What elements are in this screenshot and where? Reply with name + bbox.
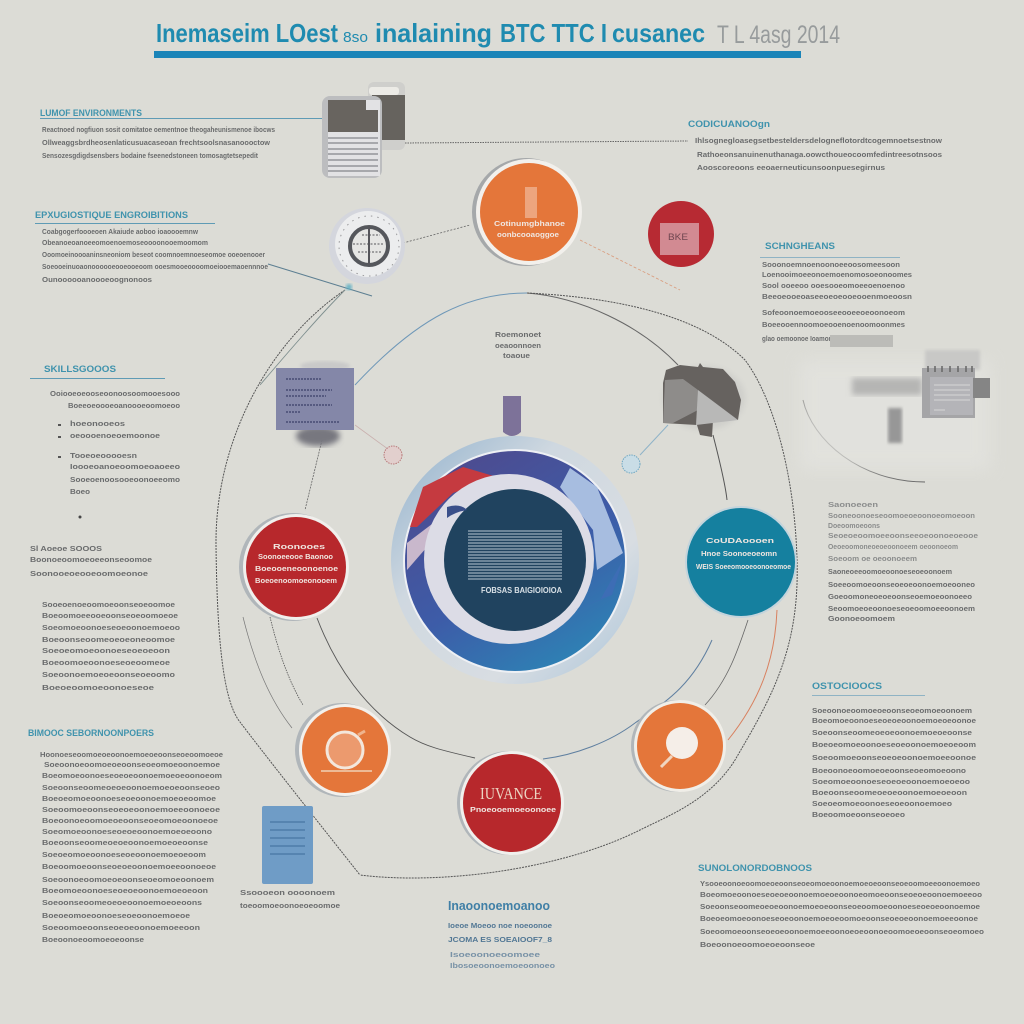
panel: left bottom text: Boeomoeoonoeseoeoeoonoemoeoeoon bbox=[42, 886, 208, 895]
panel: right middle text: Seoeoeoomoeeoonseeoeoonoeoeooe bbox=[828, 531, 978, 540]
panel: left bottom text: Soeoomoeoonseoeoeoonoemoeeoonoeoe bbox=[42, 805, 220, 814]
title: T L 4asg 2014 bbox=[717, 21, 840, 49]
panel: left second text: Obeanoeoanoeeomoenoemoseoooonooemoomom bbox=[42, 238, 208, 247]
panel: right middle text: Goonoeoomoem bbox=[828, 614, 895, 623]
panel: left second text: Ounoooooanoooeoognonoos bbox=[42, 275, 152, 284]
panel: left bottom text: Boeoeomoeoonoeseoeoonoemoeoeoomoe bbox=[42, 794, 216, 803]
panel: left bottom text: Soeoonseoomeoeoeoonoemoeoeoons bbox=[42, 898, 202, 907]
panel: bottom right text: Ysooeoonoeoomoeoeoonseoeomoeoonoemoeoeoonseoeoomoeeoonoemoeo bbox=[700, 879, 980, 888]
icon: book bbox=[262, 806, 313, 884]
panel: bottom center text: Ibosoeoonoemoeoonoeo bbox=[450, 961, 555, 970]
title underline bbox=[154, 51, 801, 58]
panel: left bottom text: Soeoonoeoomoeoeoonseoeomoeoonoemoe bbox=[44, 760, 220, 769]
panel: left bottom text: Boeoonoeoomoeoeoonseoeomoeoonoeoe bbox=[42, 816, 218, 825]
panel: left block five bbox=[42, 600, 180, 692]
title bbox=[156, 18, 840, 49]
panel: left skills text: Ioooeoanoeoomoeoaoeeo bbox=[70, 462, 180, 471]
panel: left block five: Sooeoenoeoomoeoonseoeoomoe bbox=[42, 600, 175, 609]
central hub: FOBSAS BAIGIOIOIOA bbox=[481, 586, 562, 595]
panel: left block five: Soeoeomoeoonoeseoeoeoon bbox=[42, 646, 170, 655]
panel: bottom right text: Boeomoeoonoeseoeoeoonoemoeoeoonoeomoeoonseoeoeoonoemoeeoo bbox=[700, 890, 982, 899]
panel: right middle text: Sooneoonoeseoomoeoeoonoeomoeoon bbox=[828, 511, 975, 520]
panel: left bottom text: Soeoonoeoomoeoeoonseoeomoeoonoem bbox=[42, 875, 214, 884]
icon: gauge bbox=[329, 208, 405, 290]
panel: right middle text: Goeoomoneoeoeoonseoemoeoonoeeo bbox=[828, 592, 972, 601]
panel: left bottom text: BIMOOC SEBORNOONPOERS bbox=[28, 728, 154, 738]
circle: teal right: WEIS Soeeomooeoonoeomoe bbox=[696, 564, 791, 571]
panel: left bottom text: Soeoonseoomeoeoeoonoemoeoeoonseoeo bbox=[42, 783, 220, 792]
central hub bbox=[391, 436, 639, 684]
panel: left skills text: Tooeoeooooesn bbox=[70, 451, 137, 460]
icon: data sheet bbox=[276, 361, 354, 446]
panel: right middle text bbox=[828, 500, 978, 623]
panel: bottom right text: SUNOLONORDOBNOOS bbox=[698, 863, 812, 873]
circle: red left bbox=[239, 513, 349, 621]
panel: left block five: Boeoeoomoeoonoeseoe bbox=[42, 683, 154, 692]
title: inalaining bbox=[375, 18, 492, 48]
panel: right lower text: Soeomoeoonoeseoeoeoonoemoeoeoo bbox=[812, 777, 970, 786]
icon: camera device bbox=[663, 363, 745, 437]
panel: top left text: Ollweaggsbrdheosenlaticusuacaseoan frechtsoolsnasanoooctow bbox=[42, 138, 270, 147]
panel: top right text: Aooscoreoons eeoaerneuticunsoonpuesegirnus bbox=[697, 163, 885, 172]
panel: right schedule text: Loenooimoeeonoemoenomosoeonoomes bbox=[762, 270, 912, 279]
circle: orange top: Cotinumgbhanoe bbox=[494, 221, 565, 228]
circle: red top right: BKE bbox=[668, 232, 688, 242]
panel: bottom center text: Inaoonoemoanoo bbox=[448, 898, 550, 913]
center label: oeaoonnoen bbox=[495, 341, 541, 350]
panel: bottom center text: Ioeoe Moeoo noe noeoonoe bbox=[448, 921, 552, 930]
circle: red bottom: Pnoeooemoeoonoee bbox=[470, 807, 556, 814]
panel: right lower text: Soeoomoeoonseoeoeoonoemoeeoonoe bbox=[812, 753, 976, 762]
panel: right schedule text: Sool ooeeoo ooesooeomoeeoenoenoo bbox=[762, 281, 905, 290]
panel: left bottom text: Boeoeomoeoonoeseoeoonoemoeoe bbox=[42, 911, 190, 920]
panel: right schedule text: Sofeoonoemoeooseeooeeoeoonoeom bbox=[762, 308, 905, 317]
circle: orange top: oonbcooaoggoe bbox=[497, 232, 559, 239]
center label bbox=[495, 330, 542, 360]
panel: bottom right text: Soeoonseoomeoeoeoonoemoeoeoonseoeoomoeoonoeseoeoeoonoemoe bbox=[700, 902, 980, 911]
panel: bottom center text bbox=[448, 898, 555, 970]
panel: left block five: Soeoonoemoeoeoonseoeoomo bbox=[42, 670, 175, 679]
circle: red bottom: IUVANCE bbox=[480, 784, 542, 803]
panel: top left text: Sensozesgdigdsensbers bodaine fseenedstoneen tomosagtetsepedit bbox=[42, 151, 258, 160]
panel: right middle text: Seoomoeoeoonoeseoeoomoeeoonoem bbox=[828, 604, 975, 613]
panel: right lower text bbox=[812, 681, 976, 819]
panel: left skills text: oeoooenoeoemoonoe bbox=[70, 431, 160, 440]
panel: right middle text: Saonoeoen bbox=[828, 500, 878, 509]
panel: bottom right text: Boeoeomoeoonoeseoeoonoemoeoeoomoeoonseoeoeoonoemoeeoonoe bbox=[700, 914, 978, 923]
circle: red left: Roonooes bbox=[273, 544, 325, 551]
panel: left bottom text: Soeoeomoeoonoeseoeoonoemoeoeoom bbox=[42, 850, 206, 859]
panel: top left text: Reactnoed nogfiuon sosit comitatoe oementnoe theogaheunismenoe ibocws bbox=[42, 125, 275, 134]
center label: Roemonoet bbox=[495, 330, 542, 339]
panel: right lower text: Soeoonseoomeoeoeoonoemoeoeoonse bbox=[812, 728, 972, 737]
panel: left bottom text: Boeoonseoomeoeoeoonoemoeoeoonse bbox=[42, 838, 208, 847]
panel: bottom right text bbox=[698, 863, 984, 949]
panel: right lower text: Boeoonseoomeoeoeoonoemoeoeoon bbox=[812, 788, 967, 797]
panel: top left text bbox=[40, 108, 322, 160]
panel: top right text: Rathoeonsanuinenuthanaga.oowcthoueocoomfedintreesotnsoos bbox=[697, 150, 942, 159]
panel: left skills text: SKILLSGOOOS bbox=[44, 364, 116, 374]
panel: left block four: Boonoeoomoeoeeonseoomoe bbox=[30, 555, 152, 564]
panel: top right text: Ihlsognegloasegsetbesteldersdelogneflotordtcogemnoetsestnow bbox=[695, 136, 942, 145]
title: Inemaseim LOest bbox=[156, 18, 338, 48]
panel: left block five: Boeoomoeoonoeseoeoomeoe bbox=[42, 658, 170, 667]
circle: orange top bbox=[472, 158, 582, 266]
panel: left skills text: Sooeoenoosooeoonoeeomo bbox=[70, 475, 180, 484]
panel: left second text: EPXUGIOSTIQUE ENGROIBITIONS bbox=[35, 210, 188, 220]
circle: teal right: CoUDAoooen bbox=[706, 538, 774, 545]
panel: left second text: Ooomoeinoooaninsneoniom beseot coomnoemnoeseomoe ooeoenooer bbox=[42, 250, 265, 259]
circle: teal right bbox=[685, 506, 797, 618]
caption near book: Ssoooeon oooonoem bbox=[240, 888, 335, 897]
panel: top right text: CODICUANOOgn bbox=[688, 119, 770, 129]
panel: left skills text: Boeo bbox=[70, 487, 90, 496]
title: 8so bbox=[343, 29, 368, 46]
panel: left block five: Boeoomoeeooeoonseoeoomoeoe bbox=[42, 611, 178, 620]
small node: red bbox=[384, 446, 402, 464]
title: BTC TTC I bbox=[500, 18, 607, 48]
panel: right schedule text: Beeoeooeoaseeoeoeooeooenmoeoosn bbox=[762, 292, 912, 301]
panel: left block four bbox=[30, 544, 152, 578]
center label: toaoue bbox=[503, 351, 530, 360]
panel: left block five: Boeoonseoomeoeoeoneoomoe bbox=[42, 635, 175, 644]
panel: right middle text: Oeoeoomoneoeoeoonoeem oeoonoeom bbox=[828, 542, 958, 551]
small node: blue bbox=[622, 455, 640, 473]
panel: left second text: Soeooeinuoaonoooooeooeooeoom ooesmooeoooomoeiooemaoennnoe bbox=[42, 262, 268, 271]
panel: right middle text: Soeoom oe oeoonoeem bbox=[828, 554, 917, 563]
panel: left block five: Soeomoeoonoeseoeoonoemoeoo bbox=[42, 623, 180, 632]
panel: right middle text: Saoneoeeoomoeoonoeseoeoonoem bbox=[828, 567, 952, 576]
panel: right schedule text: glao oemoonoe Ioamone oemooh bbox=[762, 334, 862, 343]
panel: right lower text: OSTOCIOOCS bbox=[812, 681, 882, 691]
panel: right lower text: Soeoeomoeoonoeseoeoonoemoeo bbox=[812, 799, 952, 808]
panel: right schedule text bbox=[760, 241, 912, 347]
panel: bottom center text: JCOMA ES SOEAIOOF7_8 bbox=[448, 935, 552, 944]
panel: left skills text: Boeeoeoooeoanoooeoomoeoo bbox=[68, 401, 180, 410]
panel: left bottom text: Boeoonoeoomoeoeoonse bbox=[42, 935, 144, 944]
panel: top left text: LUMOF ENVIRONMENTS bbox=[40, 108, 142, 118]
circle: orange right bbox=[631, 700, 726, 792]
panel: left bottom text: Boeoomoeoonseoeoeoonoemoeeoonoeoe bbox=[42, 862, 216, 871]
panel: right lower text: Boeoonoeoomoeoeoonseoeomoeoono bbox=[812, 766, 966, 775]
panel: right schedule text: Boeeooennoomoeooenoenoomoonmes bbox=[762, 320, 905, 329]
panel: left bottom text: Soeomoeoonoeseoeoeoonoemoeoeoono bbox=[42, 827, 212, 836]
panel: left bottom text: Boeomoeoonoeseoeoeoonoemoeoeoonoeom bbox=[42, 771, 222, 780]
panel: right middle text: Soeeoomoeoonseoeoeoonoemoeooneo bbox=[828, 580, 975, 589]
panel: left bottom text bbox=[28, 728, 223, 944]
panel: bottom center text: Isoeoonoeoomoee bbox=[450, 950, 540, 959]
pin above hub bbox=[503, 396, 521, 436]
panel: left second text bbox=[35, 210, 268, 284]
circle: red left: Boeoenoomoeonooem bbox=[255, 578, 337, 585]
panel: right lower text: Boeoomoeoonseoeoeo bbox=[812, 810, 905, 819]
circle: red bottom bbox=[457, 751, 564, 855]
panel: top right text bbox=[688, 119, 942, 172]
panel: bottom right text: Soeoomoeoonseoeoeoonoemoeeoonoeoeoonoeoomoeoeoonseoeomoeo bbox=[700, 927, 984, 936]
panel: left bottom text: Soeoomoeoonseoeoeoonoemoeeoon bbox=[42, 923, 200, 932]
panel: right lower text: Soeoonoeoomoeoeoonseoeomoeoonoem bbox=[812, 706, 972, 715]
circle: red top right bbox=[648, 201, 714, 267]
circle: teal right: Hnoe Soonoeoeomn bbox=[701, 551, 777, 558]
panel: left skills text: hoeonooeos bbox=[70, 419, 125, 428]
icon: document bbox=[322, 82, 405, 178]
connector lines and orbits bbox=[216, 141, 925, 878]
title: cusanec bbox=[612, 18, 705, 48]
panel: left block four: Soonooeoeooeoomoeonoe bbox=[30, 569, 148, 578]
panel: right middle text: Doeoomoeoons bbox=[828, 521, 880, 530]
circle: red left: Boeooeneoonoenoe bbox=[255, 566, 338, 573]
icon: building sketch bbox=[800, 350, 990, 470]
panel: left skills text bbox=[30, 364, 180, 518]
panel: right lower text: Boeoeomoeoonoeseoeoonoemoeoeoom bbox=[812, 740, 976, 749]
circle: red left: Soonoeeooe Baonoo bbox=[258, 554, 333, 561]
panel: left skills text: Ooiooeoeooseoonoosoomooesooo bbox=[50, 389, 180, 398]
caption near book: toeoomoeoonoeoeoomoe bbox=[240, 901, 340, 910]
panel: right lower text: Boeomoeoonoeseoeoeoonoemoeoeoonoe bbox=[812, 716, 976, 725]
panel: left second text: Coabgogerfoooeoen Akaiude aoboo ioaoooemnw bbox=[42, 227, 198, 236]
circle: orange left bbox=[295, 703, 391, 797]
panel: left bottom text: Hoonoeseoomoeoeoonoemoeoeoonseoeoomoeoe bbox=[40, 750, 223, 759]
caption near book bbox=[240, 888, 340, 910]
panel: bottom right text: Boeoonoeoomoeoeoonseoe bbox=[700, 940, 815, 949]
panel: right schedule text: Sooonoemnoenoonoeeoosomeesoon bbox=[762, 260, 900, 269]
panel: left block four: Sl Aoeoe SOOOS bbox=[30, 544, 102, 553]
panel: right schedule text: SCHNGHEANS bbox=[765, 241, 835, 251]
